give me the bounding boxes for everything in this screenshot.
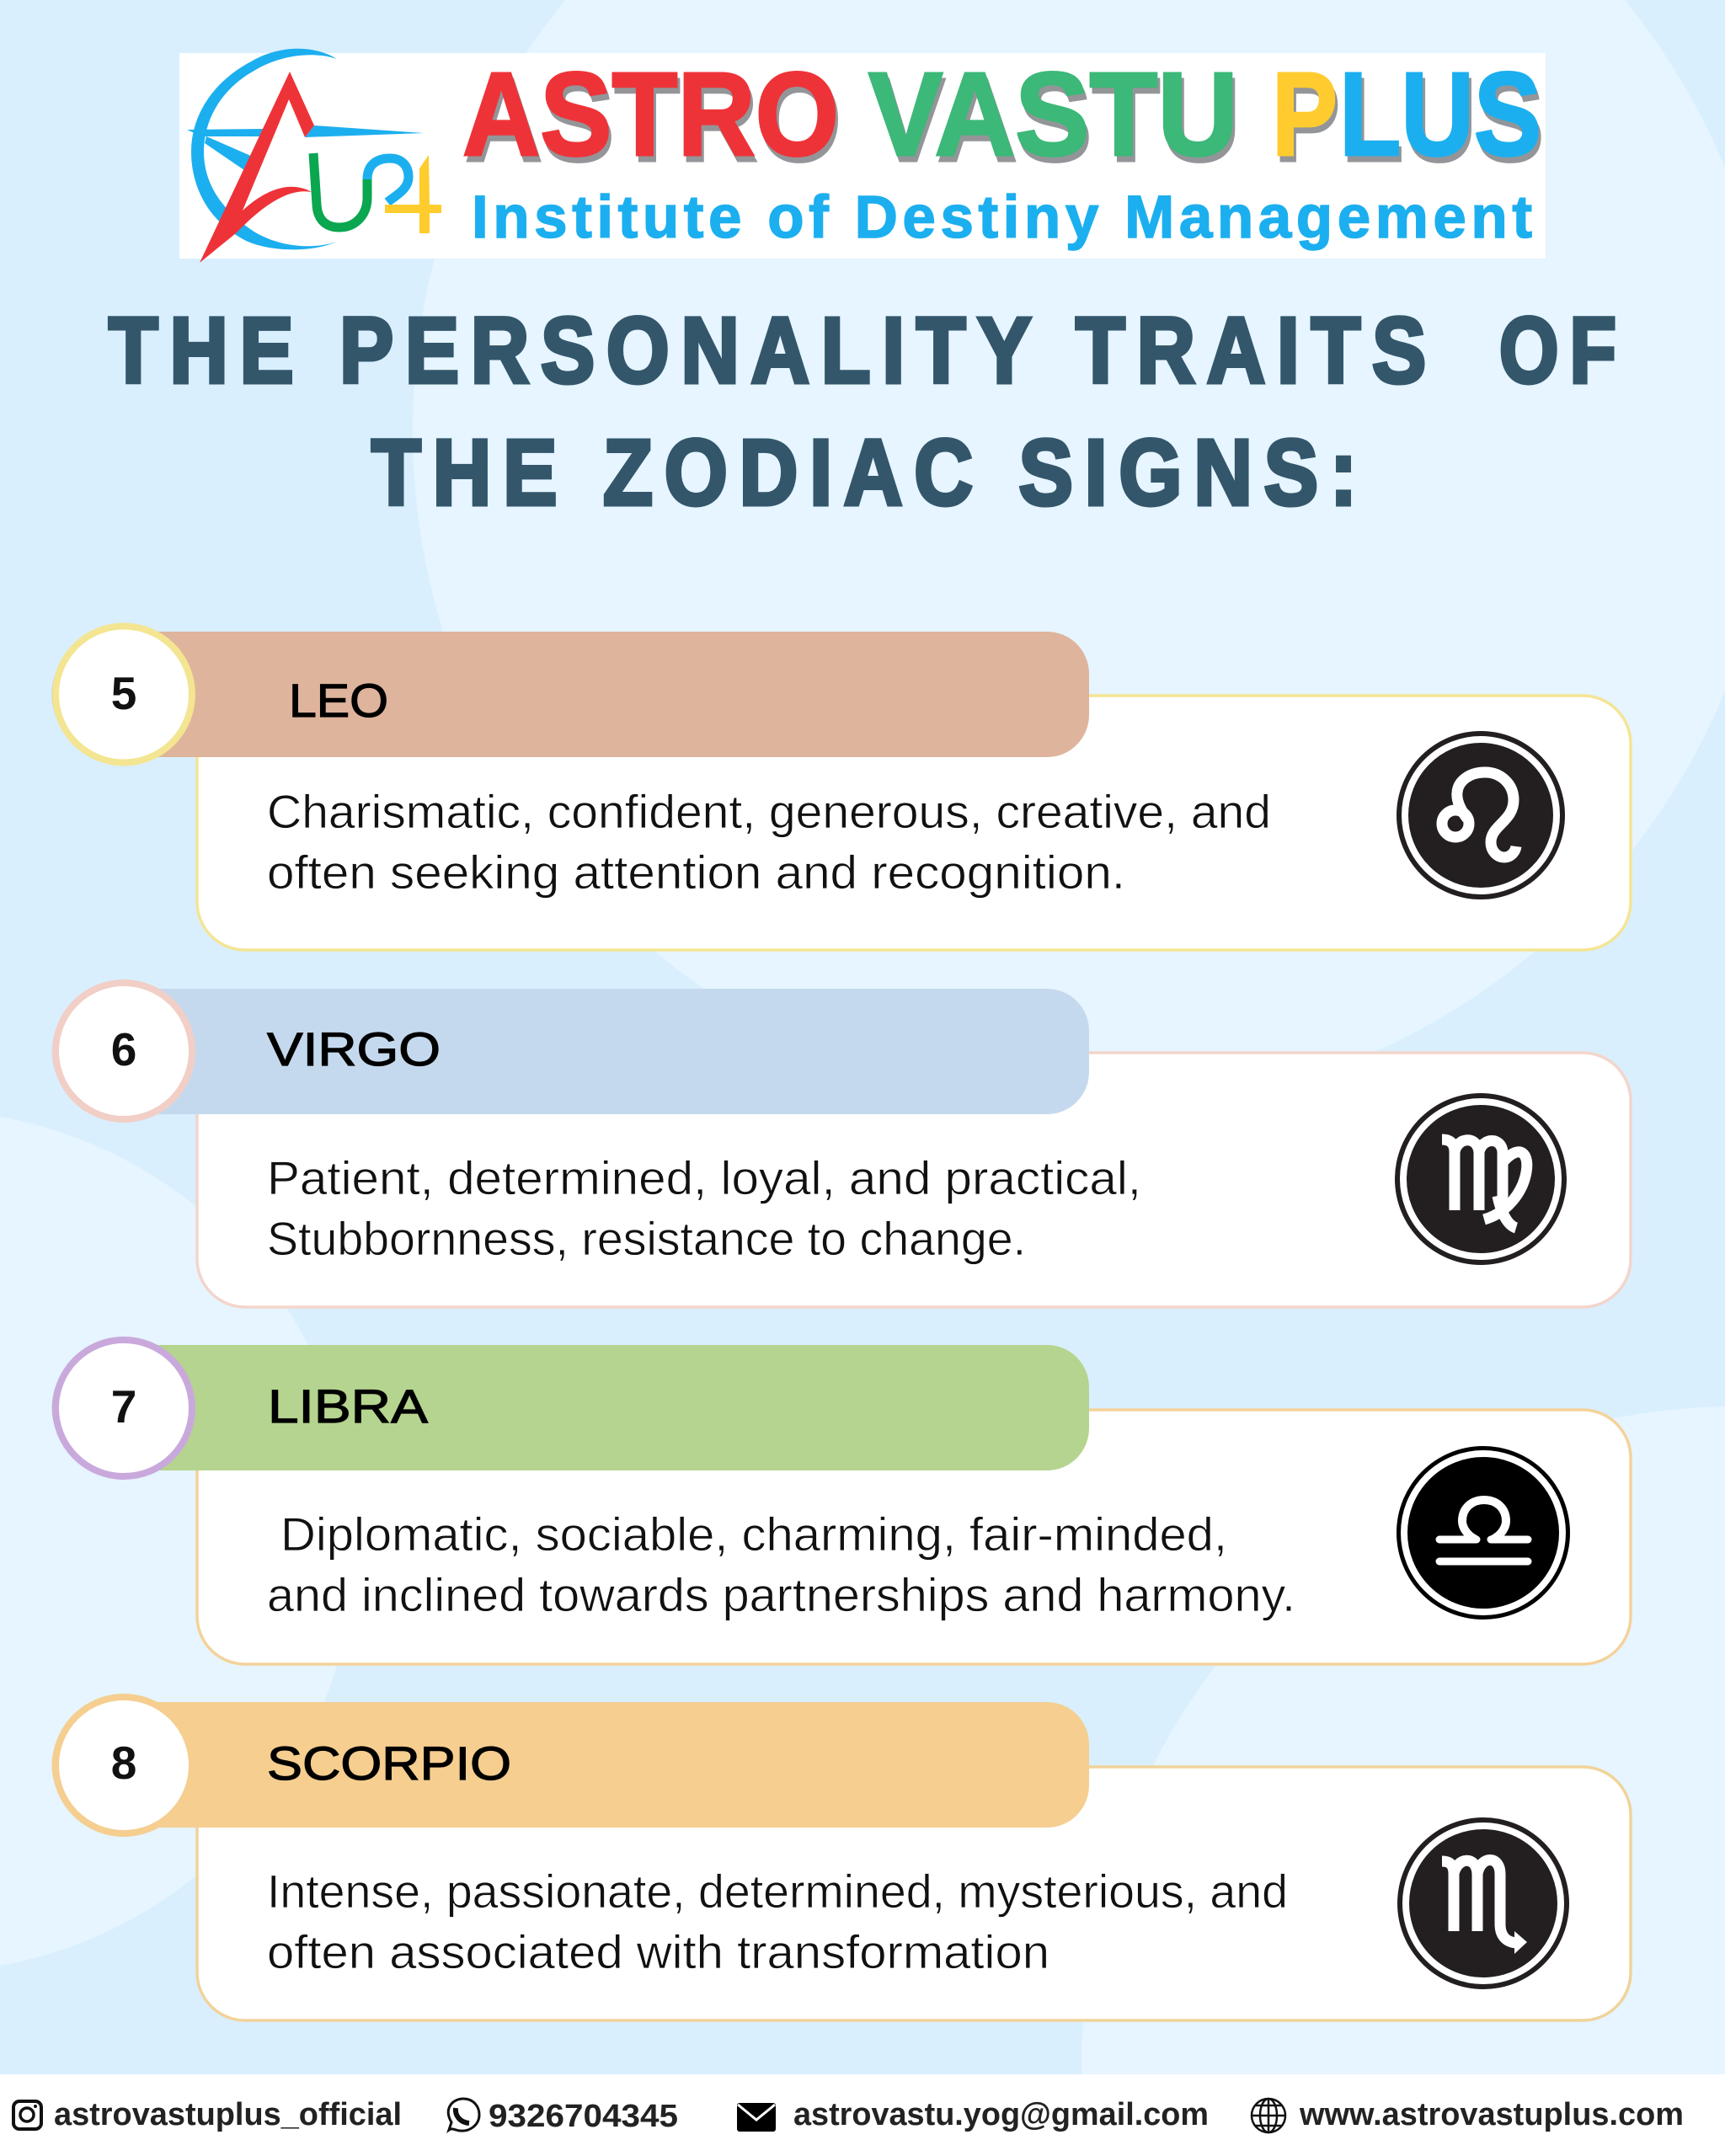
heading: Virgo: VIRGO bbox=[267, 1022, 441, 1075]
number badge 5: 5 bbox=[111, 667, 136, 719]
website: www.astrovastuplus.com bbox=[1299, 2097, 1684, 2132]
description: Virgo: Stubbornness, resistance to change. bbox=[267, 1212, 1026, 1265]
description: Scorpio: Intense, passionate, determined, mysterious, and bbox=[267, 1865, 1288, 1918]
logo wordmark: VASTU bbox=[868, 47, 1238, 180]
number badge 5 bbox=[56, 627, 192, 763]
logo wordmark: LUS bbox=[1342, 53, 1544, 186]
logo wordmark: ASTRO bbox=[465, 53, 841, 186]
number badge 6 bbox=[56, 983, 192, 1119]
logo wordmark: P bbox=[1274, 53, 1340, 186]
description: Libra: Diplomatic, sociable, charming, fair-minded, bbox=[280, 1508, 1227, 1561]
description: Leo: Charismatic, confident, generous, creative, and bbox=[267, 785, 1271, 838]
Instagram handle: astrovastuplus_official bbox=[54, 2097, 402, 2132]
description: Scorpio bbox=[267, 1865, 1288, 1978]
heading: Libra: LIBRA bbox=[268, 1380, 429, 1433]
icon: WhatsApp bbox=[448, 2099, 479, 2131]
logo tagline: Institute of Destiny Management bbox=[472, 184, 1532, 251]
title bbox=[109, 299, 1627, 525]
title: THE PERSONALITY TRAITS bbox=[109, 299, 1438, 403]
header bar: Virgo bbox=[52, 989, 1089, 1114]
logo wordmark: P bbox=[1272, 47, 1338, 180]
icon: email bbox=[737, 2103, 776, 2132]
description: Libra bbox=[267, 1508, 1295, 1621]
heading: Scorpio: SCORPIO bbox=[267, 1737, 511, 1790]
icon: Instagram bbox=[13, 2101, 41, 2129]
description: Leo: often seeking attention and recognition. bbox=[267, 846, 1125, 899]
number badge 7 bbox=[56, 1340, 192, 1476]
email address: astrovastu.yog@gmail.com bbox=[793, 2097, 1209, 2132]
header bar: Leo bbox=[52, 632, 1089, 757]
number badge 8: 8 bbox=[111, 1737, 136, 1789]
icon: Scorpio symbol bbox=[1397, 1817, 1569, 1989]
logo emblem bbox=[187, 49, 441, 263]
panel: Libra bbox=[52, 1340, 1631, 1664]
icon: globe bbox=[1252, 2099, 1285, 2132]
description: Scorpio: often associated with transformation bbox=[267, 1925, 1049, 1978]
panel: Scorpio bbox=[52, 1697, 1631, 2020]
title: OF bbox=[1499, 299, 1627, 403]
footer contact bar bbox=[0, 2074, 1725, 2156]
logo wordmark bbox=[462, 47, 1544, 186]
logo wordmark: VASTU bbox=[871, 53, 1241, 186]
number badge 7: 7 bbox=[111, 1380, 136, 1433]
icon: Libra symbol bbox=[1397, 1446, 1570, 1620]
number badge 8 bbox=[56, 1697, 192, 1833]
description: Libra: and inclined towards partnerships and harmony. bbox=[267, 1568, 1295, 1621]
heading: Leo: LEO bbox=[289, 674, 388, 727]
description: Leo bbox=[267, 785, 1271, 899]
phone number: 9326704345 bbox=[489, 2099, 678, 2134]
header bar: Libra bbox=[52, 1345, 1089, 1470]
icon: Leo symbol bbox=[1397, 731, 1565, 899]
title: THE ZODIAC SIGNS: bbox=[371, 421, 1369, 525]
panel: Leo bbox=[52, 627, 1631, 950]
description: Virgo bbox=[267, 1151, 1141, 1265]
panel: Virgo bbox=[52, 983, 1631, 1307]
logo wordmark: ASTRO bbox=[462, 47, 839, 180]
icon: Virgo symbol bbox=[1395, 1093, 1567, 1265]
header bar: Scorpio bbox=[52, 1702, 1089, 1828]
number badge 6: 6 bbox=[111, 1023, 136, 1075]
logo wordmark: LUS bbox=[1339, 47, 1541, 180]
logo banner bbox=[179, 47, 1546, 263]
description: Virgo: Patient, determined, loyal, and practical, bbox=[267, 1151, 1141, 1204]
